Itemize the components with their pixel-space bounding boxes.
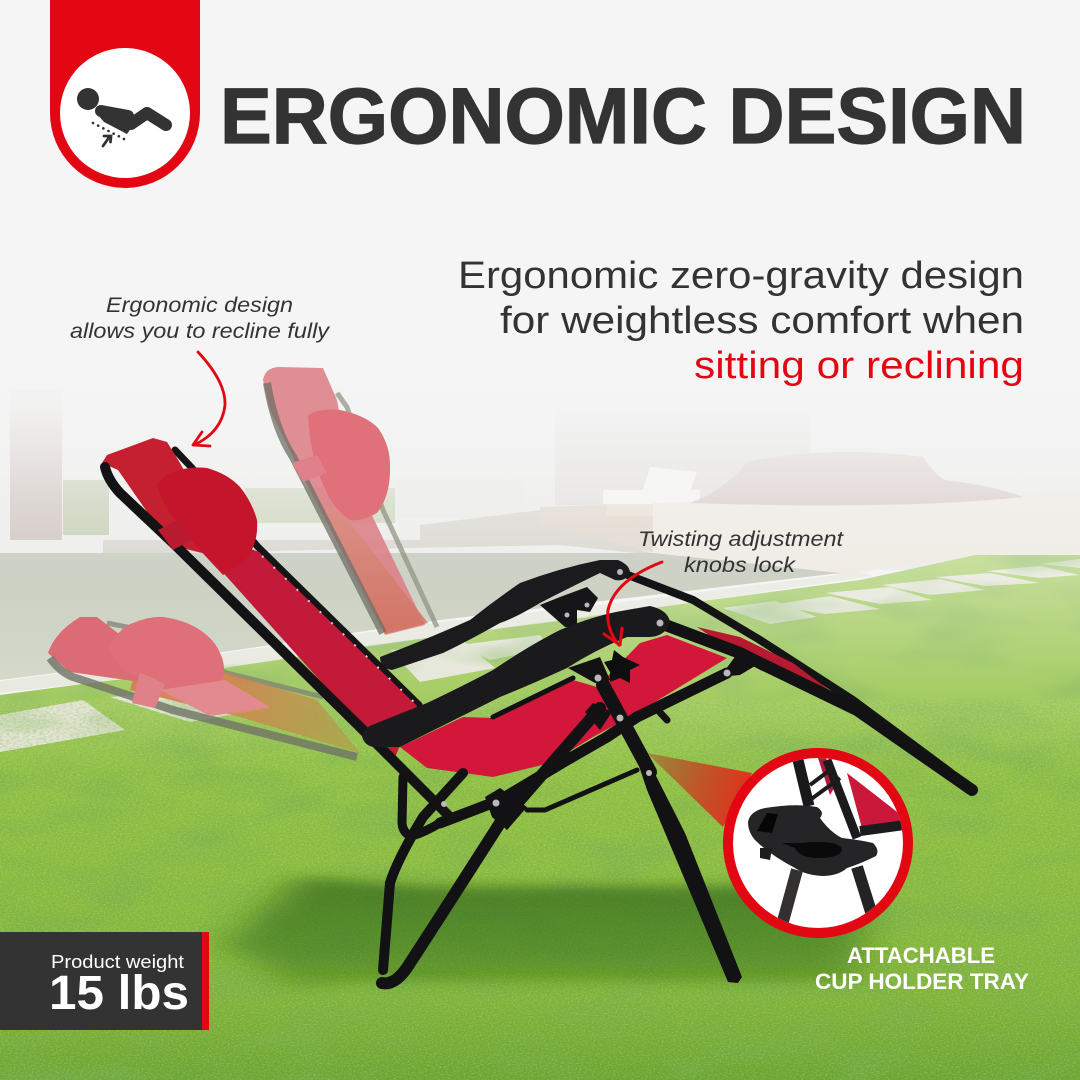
back left tube [105, 467, 450, 817]
ghost chair: upright recline position [263, 367, 437, 635]
pool [0, 553, 840, 680]
callout: knobs: knobs lock [684, 554, 797, 577]
leg rest joint [720, 650, 760, 677]
ghost chair: fully reclined position [48, 617, 360, 757]
seat and leg frame [382, 623, 972, 983]
inset: cup holder tray [723, 748, 913, 938]
callout: knobs: Twisting adjustment [638, 528, 844, 551]
background: garden scene [0, 421, 1080, 1080]
ground shadow [225, 876, 860, 992]
callout beam to tray inset [647, 753, 752, 827]
main bracket [485, 788, 527, 830]
building and far garden [0, 380, 1080, 575]
back right tube [175, 450, 419, 705]
top fade [0, 360, 1080, 770]
lawn [0, 555, 1080, 1080]
headrest pillow [157, 468, 257, 575]
seat pivot bracket [568, 657, 610, 683]
head band fabric [102, 438, 230, 560]
pivot bolts [441, 569, 730, 807]
adjustment knob [604, 650, 640, 683]
badge: red tab with ergonomic icon [50, 0, 200, 188]
icon: reclining person [77, 88, 166, 146]
subheading text [458, 255, 1024, 387]
subheading text: sitting or reclining [694, 345, 1024, 387]
stepping stones [0, 559, 1080, 752]
callout: recline [70, 294, 331, 343]
red fabric in inset [847, 773, 902, 826]
seat back fabric [175, 520, 417, 762]
tray label: ATTACHABLE [847, 943, 995, 968]
leg rest fabric [697, 627, 853, 708]
subheading text: Ergonomic zero-gravity design [458, 255, 1024, 297]
near armrest [362, 606, 670, 747]
subheading text: for weightless comfort when [500, 300, 1024, 342]
tray label: CUP HOLDER TRAY [815, 969, 1029, 994]
callout: recline: Ergonomic design [106, 294, 293, 317]
arrow: recline callout to headrest [193, 352, 225, 446]
far frame tube and far armrest [380, 560, 950, 772]
callout: knobs [638, 528, 844, 577]
tray [748, 805, 877, 876]
seat fabric [400, 635, 727, 777]
title: ERGONOMIC DESIGN [220, 71, 1026, 160]
reclining chair [102, 438, 972, 983]
tray label [815, 943, 1029, 994]
pool coping [0, 572, 872, 693]
front leg [637, 760, 742, 983]
weight panel: 15 lbs [49, 967, 189, 1020]
weight panel [0, 932, 209, 1030]
arrow: knob callout to knob [604, 562, 662, 645]
weight panel: Product weight [51, 951, 184, 972]
back lacing stitches [262, 556, 416, 704]
callout: recline: allows you to recline fully [70, 320, 331, 343]
headrest strap [158, 520, 192, 550]
grass texture [0, 555, 1080, 1080]
